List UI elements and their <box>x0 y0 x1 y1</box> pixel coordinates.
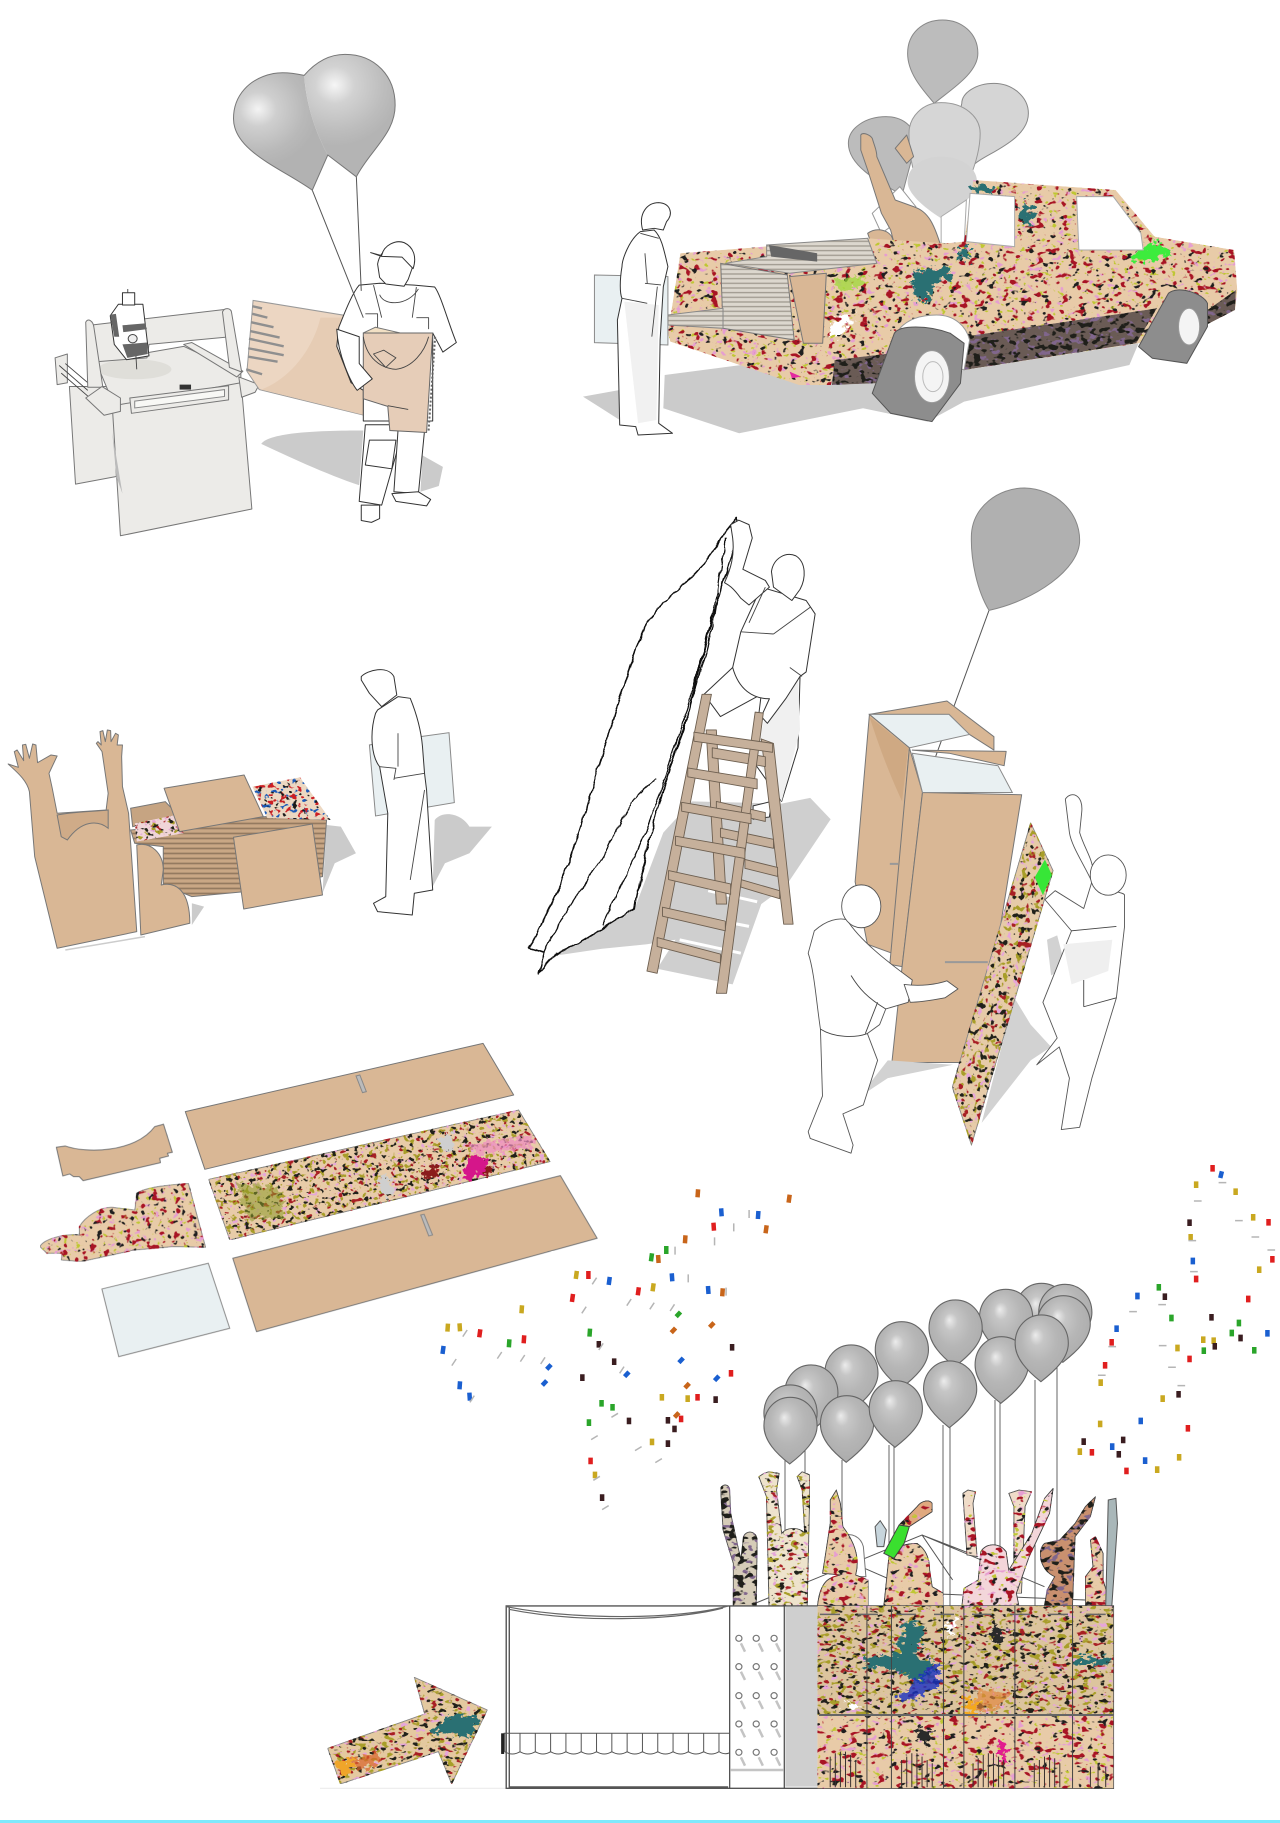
balloon cluster <box>764 1283 1092 1464</box>
orange confetti <box>658 1189 790 1417</box>
assembled box <box>855 701 1022 1063</box>
scene: flat pack pieces <box>40 1043 597 1357</box>
shadows under men <box>863 935 1065 1123</box>
layered stack <box>131 775 331 909</box>
confetti <box>442 1165 1275 1510</box>
ground line <box>320 1787 506 1789</box>
heart balloons and strings <box>233 54 395 318</box>
front wheel <box>872 327 964 422</box>
wheel arch <box>900 315 970 370</box>
tall painted board <box>952 823 1053 1145</box>
cut-out figure <box>8 730 145 950</box>
man holding board <box>1037 795 1126 1130</box>
scene: CNC cutting with heart balloons <box>55 54 456 536</box>
tan plank with slot, lower <box>233 1176 597 1332</box>
ladder and cloth shadow <box>557 798 831 984</box>
shadow: worker <box>261 431 443 492</box>
cab windows <box>966 193 1143 250</box>
cyan page edge <box>0 1820 1280 1823</box>
man watching truck <box>617 203 673 435</box>
red confetti <box>479 1165 1272 1474</box>
tan plank with slot <box>185 1043 514 1169</box>
shadow: man <box>433 814 492 887</box>
wooden ladder <box>647 694 793 993</box>
balloon bunch <box>848 20 1028 218</box>
CNC machine <box>55 289 259 536</box>
grey confetti <box>452 1183 1275 1510</box>
truck body <box>668 180 1237 385</box>
scalloped awning <box>501 1733 729 1754</box>
tent roof lines <box>749 1535 1085 1606</box>
crowd cut-outs <box>721 1472 1117 1606</box>
truck shadow <box>583 343 1139 433</box>
truck lower dark band <box>832 290 1236 385</box>
painted plank <box>209 1110 550 1240</box>
second cut-out piece <box>137 844 190 935</box>
stacked boards in truck bed <box>668 238 877 343</box>
painted wall <box>817 1606 1113 1788</box>
scene: pickup truck <box>583 20 1237 435</box>
white gaps in ladder shadow <box>680 891 757 953</box>
pale rectangular panel <box>102 1263 230 1357</box>
worker on ladder <box>704 520 815 819</box>
dark confetti <box>582 1219 1241 1501</box>
balloon string <box>922 610 989 792</box>
rear wheel <box>1139 290 1207 363</box>
single balloon <box>971 488 1080 610</box>
painted figure piece <box>40 1183 206 1262</box>
scene: cardboard stack with cut-out figure <box>8 670 492 950</box>
green confetti <box>509 1246 1254 1426</box>
yellow confetti <box>447 1181 1259 1478</box>
grey strip <box>785 1607 817 1787</box>
building frame <box>506 1606 1113 1788</box>
man looking at stack <box>361 670 433 915</box>
perforated panel <box>731 1635 783 1770</box>
cut-out figure raising arms <box>861 134 966 267</box>
draped cloth <box>529 518 737 973</box>
board with slots <box>246 300 388 421</box>
worker carrying cut board <box>337 242 456 522</box>
white panel behind man <box>594 275 668 345</box>
man pushing box <box>808 885 958 1153</box>
truck paint splashes <box>790 185 1173 378</box>
scene: ladder, cloth and assembled box <box>529 488 1126 1153</box>
curved tan piece <box>56 1124 172 1181</box>
blue confetti <box>442 1171 1267 1464</box>
balloon strings <box>785 1360 1057 1620</box>
arrow sign <box>328 1677 487 1784</box>
stack shadows <box>192 825 356 925</box>
scene: finished stand <box>320 1472 1117 1788</box>
white panel behind man <box>369 733 454 816</box>
